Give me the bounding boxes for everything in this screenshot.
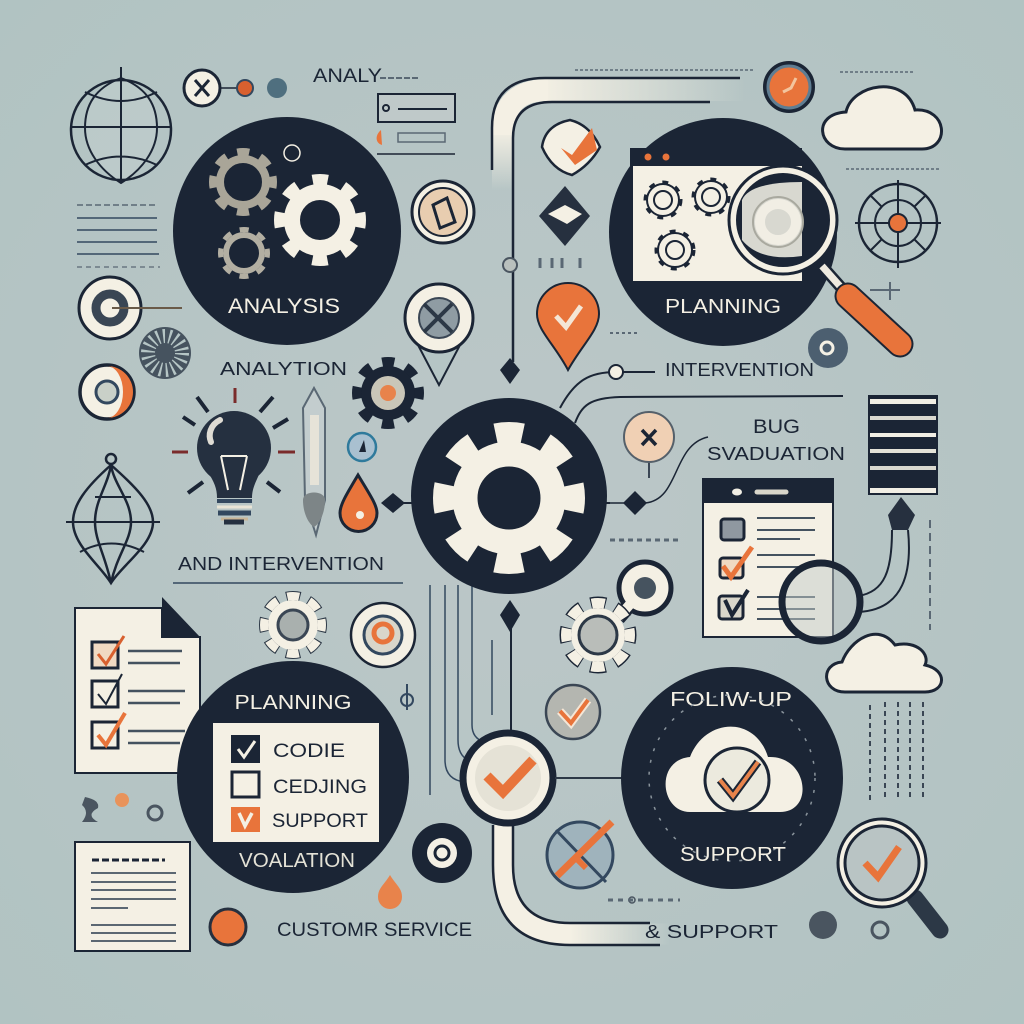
- icon: check tag: [542, 120, 600, 175]
- label: customer service: CUSTOMR SERVICE: [277, 920, 472, 941]
- icon: magnifier ring: [782, 563, 860, 641]
- icon: orange badge top: [765, 63, 813, 111]
- small marks bottom right: [608, 897, 888, 939]
- icon: star diamond: [539, 186, 590, 246]
- icon: paired small marks: [82, 684, 413, 822]
- icon: magnifier top: [729, 166, 900, 344]
- label: evaluation: SVADUATION: [707, 444, 845, 464]
- icon: globe top left: [71, 67, 171, 183]
- panel: planning bottom: [177, 661, 409, 893]
- icon: line node: [503, 258, 517, 272]
- label: analytion: ANALYTION: [220, 359, 347, 379]
- icon: cloud with check: [666, 727, 803, 812]
- icon: target gear: [351, 603, 415, 667]
- icon: gear orange: [357, 362, 419, 424]
- icon: orange pin: [537, 283, 599, 370]
- icon: crosshair target: [855, 180, 941, 268]
- heading: support: SUPPORT: [680, 844, 786, 866]
- icon: light bulb: [172, 388, 295, 522]
- icon: wrench gear: [566, 562, 671, 667]
- icon: arrow tip: [888, 497, 915, 530]
- heading: planning: PLANNING: [234, 692, 352, 714]
- panel: planning top: [609, 118, 837, 346]
- icon: compass: [66, 454, 160, 583]
- icon: orange figure: [378, 875, 402, 909]
- label: customer service: [210, 909, 472, 945]
- list card: CEDJING: [273, 777, 367, 798]
- list card: CODIE: [273, 741, 345, 762]
- icon: small gear: [220, 230, 268, 276]
- icon: striped bars: [868, 395, 938, 495]
- connector lines: [173, 372, 909, 795]
- label: intervention: [609, 360, 814, 380]
- panel: central gear: [411, 398, 607, 594]
- label: and intervention: AND INTERVENTION: [178, 554, 384, 574]
- label: bug: BUG: [753, 417, 800, 438]
- icon: gear left bottom: [264, 596, 322, 654]
- faint text marks: [380, 70, 940, 630]
- icon: large gear: [280, 180, 360, 260]
- heading: evaluation: VOALATION: [239, 850, 355, 872]
- heading: follow-up: FOLIW-UP: [670, 689, 792, 711]
- panel: follow-up: [621, 667, 843, 889]
- connector dots: [555, 768, 642, 788]
- panel: text document: [75, 842, 190, 951]
- icon: target left: [79, 277, 182, 339]
- list card: [213, 723, 379, 842]
- label: intervention: INTERVENTION: [665, 360, 814, 380]
- dashed rain lines: [870, 702, 923, 800]
- heading: planning: PLANNING: [665, 296, 781, 318]
- heading: analysis: ANALYSIS: [228, 295, 340, 318]
- panel: analysis: [173, 117, 401, 345]
- panel: document checklist: [75, 597, 200, 773]
- icon: x badge: [624, 412, 674, 462]
- icon: crossed check disc: [547, 822, 613, 888]
- browser window: [630, 148, 802, 281]
- process track bottom: [493, 825, 670, 945]
- text lines left: [77, 205, 160, 267]
- label: analy: ANALY: [313, 66, 382, 87]
- list card: SUPPORT: [272, 811, 368, 832]
- icon: orange drop: [340, 475, 377, 532]
- icon: at badge: [412, 823, 472, 883]
- process track top: [492, 78, 745, 362]
- icon: badge right of analysis: [412, 181, 474, 243]
- icon: cloud right: [827, 634, 942, 692]
- icon: central check badge: [463, 733, 553, 823]
- icon: small nodes top: [184, 70, 287, 106]
- icon: map pin: [405, 284, 473, 385]
- icon: slider panel: [377, 94, 455, 154]
- icon: pencil: [303, 388, 325, 535]
- icon: magnifier bottom right: [838, 819, 940, 930]
- icon: small dark disc: [808, 328, 848, 368]
- center node arrows: [381, 358, 647, 632]
- icon: top gear: [213, 152, 273, 212]
- panel: checklist window: [703, 479, 833, 637]
- icon: small blue dot: [348, 433, 376, 461]
- icon: radial disc: [139, 327, 191, 379]
- label: support: & SUPPORT: [645, 922, 778, 942]
- icon: check circle small: [546, 685, 600, 739]
- icon: cloud top right: [823, 87, 941, 149]
- icon: orange ring left: [80, 365, 134, 419]
- icon: small circle mark: [284, 145, 300, 161]
